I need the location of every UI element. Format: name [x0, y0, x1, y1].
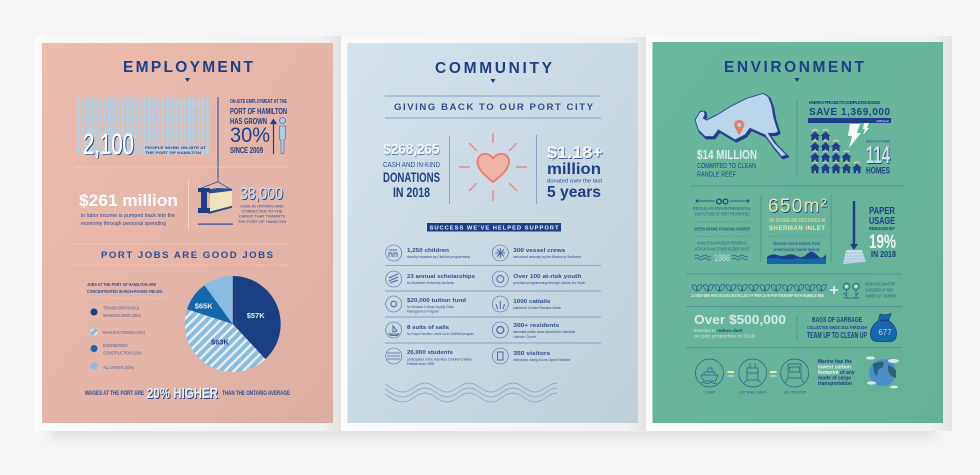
- stat: paper usage: PAPER: [869, 206, 896, 217]
- panel: environment: [652, 42, 943, 423]
- icon: plus: [830, 286, 838, 294]
- divider vertical: [188, 180, 190, 230]
- subheading: giving back: GIVING BACK TO OUR PORT CITY: [394, 102, 594, 113]
- on-site employment growth text: [230, 99, 287, 155]
- stat: 38,000: 38,000: [241, 185, 284, 204]
- stat: over 500,000: on port properties in 2018: [694, 334, 756, 338]
- paper: centre page: [341, 37, 646, 431]
- success list: right column: 300+ residents: [513, 323, 559, 329]
- stat: over 500,000: invested to reduce dust: [694, 328, 743, 333]
- stat: paper usage: 19%: [869, 232, 896, 253]
- icon: binoculars with arrows: [696, 199, 749, 204]
- divider: [75, 166, 288, 168]
- text: marine carbon footprint: [818, 359, 855, 387]
- caption: jobs in ontario: [238, 204, 286, 224]
- map: randle reef: [695, 93, 788, 158]
- wages statement: THAN THE ONTARIO AVERAGE: [222, 391, 290, 397]
- stat: 2,100: 2,100: [84, 130, 135, 162]
- caption: jobs in ontario: CARGO THAT TRANSITS: [239, 214, 286, 218]
- caption: jobs in ontario: JOBS IN ONTARIO ARE: [240, 204, 284, 208]
- divider vertical: [796, 315, 798, 340]
- list dividers: [693, 222, 752, 236]
- wages statement: 20% HIGHER: [148, 386, 219, 403]
- energy savings: SAVE 1,369,000: [809, 107, 890, 118]
- stat: 114 homes: 114: [867, 143, 891, 170]
- heading marker: [794, 78, 800, 82]
- pie chart: $57K: [247, 311, 265, 320]
- text: marine carbon footprint: transportation: [818, 381, 852, 387]
- caption: people work on-site: PEOPLE WORK ON-SITE AT: [145, 145, 207, 150]
- banner: success: [427, 223, 561, 232]
- stat: over 500,000: [694, 312, 786, 338]
- stat: paper usage: USAGE: [869, 216, 895, 227]
- heading marker: [490, 79, 496, 83]
- divider vertical: [760, 195, 762, 262]
- success list: left column: for Mohawk College Supply Chain: [407, 305, 454, 309]
- paper: left page: [35, 36, 341, 431]
- text: marine carbon footprint: Marine has the: [818, 359, 852, 365]
- success list: left column: 26,000 students: [407, 350, 453, 356]
- pie legend: WAREHOUSING (38%): [103, 313, 141, 318]
- environmental commitments list: INSPECTIONS OF PORT PROPERTIES: [694, 212, 750, 216]
- stat: 1986 with waves: 1986: [714, 253, 730, 263]
- energy savings: ENERGY PROJECTS COMPLETED IN 2018: [809, 100, 881, 105]
- rule: [385, 117, 601, 119]
- success list: left column: participated at the Hamilton Children's Water: [407, 358, 473, 362]
- success list: left column: [407, 248, 475, 366]
- success list: left column: for McMaster University students: [407, 281, 454, 285]
- growth arrow: [271, 120, 276, 154]
- environmental commitments list: [693, 206, 752, 252]
- environmental commitments list: REGULAR ENVIRONMENTAL: [693, 206, 752, 211]
- stat: 650 m2: 650m²: [768, 196, 827, 217]
- stat: 114 homes: HOMES: [866, 166, 890, 176]
- panel: community: [348, 43, 638, 423]
- stat: bags of garbage: BAGS OF GARBAGE: [812, 315, 862, 324]
- caption: equivalents: [703, 390, 807, 394]
- energy savings: kWh/year: [876, 119, 889, 123]
- icon: garbage bag 677: 677: [878, 328, 892, 337]
- heading: community: COMMUNITY: [435, 60, 553, 77]
- environmental commitments list: ACTION PLAN STAKEHOLDER SINCE: [694, 246, 750, 252]
- divider: [73, 243, 290, 245]
- rule: [690, 185, 905, 187]
- pie chart: $63K: [211, 338, 230, 346]
- on-site employment growth text: SINCE 2009: [230, 146, 263, 155]
- success list: right column: 1000 cattails: [513, 299, 550, 305]
- divider vertical: [448, 136, 450, 204]
- stat: 2,100: 2,100: [83, 129, 134, 161]
- success list: right column: 350 visitors: [513, 351, 550, 357]
- stat: paper usage: REDUCED BY: [869, 226, 895, 231]
- success list: right column: welcomed during Doors Open Hamilton: [513, 358, 570, 362]
- success list: left column: for Royal Hamilton Yacht Club CANSail program: [407, 332, 474, 336]
- panel background: [652, 42, 943, 423]
- stat: 650 m2: OF SHORELINE RESTORED AT: [769, 218, 826, 224]
- caption: sherman inlet: Sherman Inlet & Hobson Pond: [773, 241, 820, 246]
- icon: houses: [810, 130, 862, 173]
- subheading: port jobs: PORT JOBS ARE GOOD JOBS: [101, 250, 274, 261]
- icons: success row markers: [386, 245, 508, 364]
- stat: paper usage: [869, 206, 896, 259]
- caption: pollinator garden: [865, 282, 896, 298]
- icon: equals: [770, 371, 776, 377]
- icon: lightning bolts: [848, 123, 869, 148]
- on-site employment growth text: HAS GROWN: [230, 117, 267, 126]
- icons: 12 bee hive boxes: [692, 284, 826, 291]
- caption: labor income: in labor income is pumped back into the: [81, 213, 175, 219]
- stat: 1.18 million: 5 years: [547, 184, 601, 201]
- stat: donations: DONATIONS: [383, 169, 440, 185]
- caption: pollinator garden: JAMES ST. NORTH: [865, 294, 896, 298]
- icon: garbage bag 677: [870, 314, 896, 342]
- caption: people work on-site: [145, 145, 207, 155]
- panel background: [348, 43, 638, 423]
- pie legend: TRANSPORTATION &: [103, 306, 139, 310]
- stat: 650 m2: [768, 196, 828, 232]
- heading: employment: EMPLOYMENT: [123, 59, 254, 76]
- success list: right column: 300 vessel crews: [513, 248, 565, 254]
- stat: bags of garbage: TEAM UP TO CLEAN UP: [807, 331, 867, 340]
- stat: 1.18 million: $1.18+: [547, 144, 603, 162]
- divider: [768, 236, 825, 238]
- success list: left column: $20,000 tuition fund: [407, 298, 467, 304]
- stat: 1.18 million: $1.18+: [548, 145, 604, 163]
- caption: jobs in ontario: CONNECTED TO THE: [242, 208, 283, 214]
- icon: water: [767, 252, 826, 264]
- stat: 1.18 million: [547, 144, 604, 201]
- on-site employment growth text: ON-SITE EMPLOYMENT AT THE: [230, 99, 287, 105]
- success list: left column: 8 suits of sails: [407, 325, 449, 331]
- energy savings: [808, 100, 891, 123]
- caption: equivalents: 301 RAIL CARS: [739, 390, 767, 394]
- pie legend: MANUFACTURING (42%): [103, 330, 145, 335]
- stat: 114 homes: 114: [866, 142, 890, 169]
- stat: 38,000: 38,000: [240, 184, 283, 203]
- pie legend: CONSTRUCTION (10%): [103, 350, 142, 356]
- caption: sherman inlet: preserved as natural spaces: [774, 247, 820, 252]
- stat: 1.18 million: donated over the last: [547, 178, 603, 184]
- stat: 1986 with waves: [695, 253, 748, 263]
- success list: right column: planted in Cootes Paradise Marsh: [513, 306, 561, 310]
- success list: right column: provided programming through Liberty for Youth: [513, 281, 585, 285]
- stat: 114 homes: [866, 140, 891, 176]
- row rules: [385, 266, 601, 343]
- caption: sherman inlet: [773, 241, 820, 252]
- success list: left column: 23 annual scholarships: [407, 274, 475, 280]
- icon: ship: [696, 359, 724, 387]
- text: marine carbon footprint: lowest carbon: [818, 364, 851, 370]
- rule: [686, 306, 902, 308]
- heading marker: [185, 78, 190, 82]
- paper shadow: [50, 428, 935, 437]
- caption: equivalents: 961 TRUCKS: [784, 390, 807, 394]
- stat: donations: $268,265: [384, 141, 440, 158]
- decoration: waves: [385, 383, 557, 402]
- success list: right column: welcomed annually by the Mission to Seafarers: [513, 255, 581, 259]
- rule: [686, 346, 902, 348]
- environmental commitments list: HAMILTON HARBOUR REMEDIAL: [697, 240, 747, 246]
- stat: 261 million: $261 million: [79, 191, 178, 210]
- icon: equals: [728, 371, 734, 377]
- wages statement: 20% HIGHER: [147, 385, 218, 402]
- success list: left column: Management Program: [407, 310, 439, 314]
- crane cable: [217, 97, 219, 177]
- stat: 14 million: COMMITED TO CLEAN: [697, 161, 756, 170]
- on-site employment growth text: 30%: [230, 124, 270, 147]
- paper: right page: [646, 36, 952, 431]
- environmental commitments list: GREEN MARINE FOUNDING MEMBER: [694, 226, 751, 232]
- divider: [73, 264, 290, 266]
- stat: donations: $268,265: [384, 142, 440, 159]
- stat: donations: [383, 141, 440, 200]
- stat: donations: CASH AND IN-KIND: [383, 160, 440, 169]
- success list: right column: attended public tours aboard the Hamilton: [513, 330, 575, 334]
- caption: labor income: [81, 213, 175, 227]
- panel: employment: [42, 43, 333, 423]
- success list: right column: [513, 248, 585, 362]
- legend intro text: [87, 282, 166, 298]
- pie chart: $65K: [195, 302, 213, 310]
- stat: bags of garbage: COLLECTED SINCE 2014 THROUGH: [807, 325, 867, 330]
- icon: steel beam hanging from crane: [198, 177, 233, 225]
- stat: donations: IN 2018: [393, 185, 430, 200]
- icon: rail car: [739, 359, 767, 387]
- heading: environment: ENVIRONMENT: [724, 59, 865, 76]
- icon: person: [280, 118, 286, 154]
- pie legend: ENGINEERING/: [103, 343, 129, 348]
- icon: flowers: [843, 283, 860, 298]
- divider vertical: [830, 195, 832, 262]
- success list: right column: Over 100 at-risk youth: [513, 274, 582, 280]
- divider vertical: [536, 135, 538, 204]
- wages statement: WAGES AT THE PORT ARE: [85, 391, 144, 397]
- caption: bee hive boxes: 12 NEW BEE HIVE BOXES INSTALLED AT PIER 15 IN PARTNERSHIP WITH HUMBLE BEE: [691, 293, 824, 298]
- icon: heart with rays: [459, 133, 527, 201]
- legend intro text: JOBS AT THE PORT OF HAMILTON ARE: [87, 282, 157, 288]
- success list: left column: directly impacted by CityKidz programming: [407, 255, 470, 259]
- text: marine carbon footprint: footprint of any: [818, 370, 855, 376]
- pie chart: [185, 276, 281, 372]
- icon: globe with clouds: [866, 356, 899, 388]
- caption: jobs in ontario: THE PORT OF HAMILTON: [238, 219, 286, 224]
- caption: pollinator garden: NEW POLLINATOR: [865, 282, 895, 286]
- panel background: [42, 43, 333, 423]
- success list: right column: Harbour Queen: [513, 335, 536, 339]
- caption: equivalents: 1 SHIP: [703, 390, 715, 394]
- stat: 650 m2: 650m²: [769, 197, 828, 218]
- caption: pollinator garden: GARDEN AT 605: [865, 288, 893, 292]
- icon: arrow onto paper stack: [843, 201, 866, 264]
- divider vertical: [796, 100, 798, 176]
- icon: truck: [781, 359, 809, 387]
- on-site employment growth text: PORT OF HAMILTON: [230, 106, 287, 116]
- stat: 14 million: [697, 147, 757, 178]
- stat: bags of garbage: [807, 315, 867, 340]
- banner: success: SUCCESS WE'VE HELPED SUPPORT: [430, 226, 559, 232]
- rule: [385, 95, 601, 97]
- stat: 14 million: $14 MILLION: [697, 147, 757, 162]
- success list: left column: Festival since 2008: [407, 362, 434, 366]
- stat: 1.18 million: million: [547, 161, 601, 178]
- success list: left column: 1,250 children: [407, 248, 450, 254]
- pie legend: ALL OTHER (10%): [103, 365, 134, 370]
- stat: over 500,000: Over $500,000: [694, 312, 786, 327]
- stat: 14 million: RANDLE REEF: [697, 170, 736, 178]
- legend intro text: CONCENTRATED IN HIGH-PAYING FIELDS:: [87, 289, 163, 295]
- caption: labor income: economy through personal spending: [81, 221, 166, 227]
- stat: paper usage: IN 2018: [871, 250, 896, 259]
- pie legend: [90, 306, 145, 370]
- text: marine carbon footprint: mode of cargo: [818, 376, 851, 382]
- caption: people work on-site: THE PORT OF HAMILTON: [145, 150, 201, 155]
- stat: 650 m2: SHERMAN INLET: [769, 226, 825, 232]
- stat: 114 homes: ENOUGH TO POWER: [866, 140, 890, 144]
- wages statement: [85, 385, 290, 403]
- rule: [686, 273, 902, 275]
- workforce people pattern: [76, 97, 209, 155]
